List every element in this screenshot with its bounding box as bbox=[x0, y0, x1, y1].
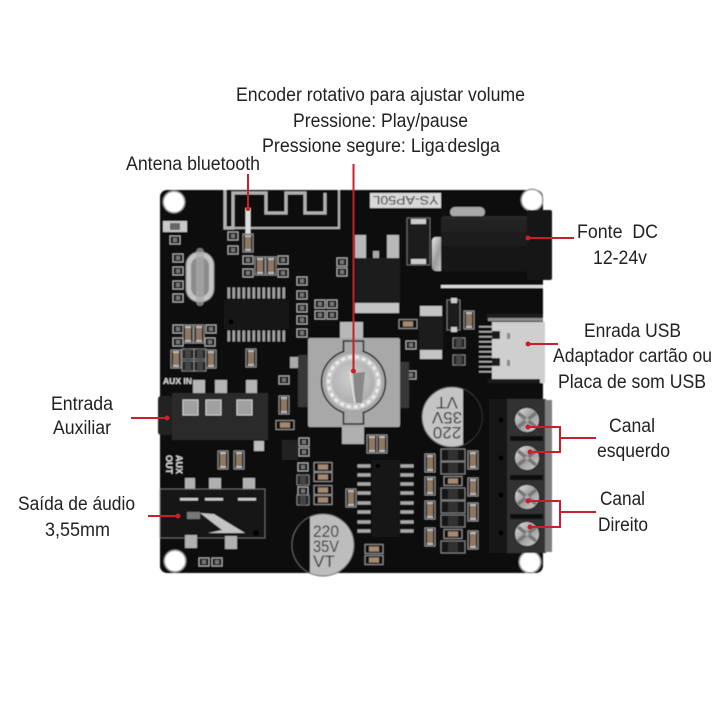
label: left channel: esquerdo bbox=[597, 441, 670, 462]
label: audio output bbox=[18, 494, 135, 541]
label: auxiliary input bbox=[51, 394, 113, 439]
connector: AUX input jack: AUX IN bbox=[163, 377, 192, 386]
label: audio output: Saída de áudio bbox=[18, 494, 135, 515]
heading: encoder callout bbox=[236, 85, 525, 157]
bluetooth antenna trace bbox=[225, 190, 339, 236]
rotary encoder bbox=[298, 322, 409, 444]
label: right channel bbox=[598, 489, 648, 536]
label: bluetooth antenna: Antena bluetooth bbox=[126, 154, 260, 175]
label: right channel: Canal bbox=[600, 489, 645, 510]
label: USB input: Enrada USB bbox=[584, 321, 681, 342]
capacitor: lower left 220 35V bbox=[292, 514, 354, 576]
label: audio output: 3,55mm bbox=[45, 520, 110, 541]
capacitor: lower left 220 35V: 35V bbox=[313, 537, 340, 556]
panel: circuit board bbox=[158, 188, 552, 576]
capacitor: upper right 220 35V: 220 bbox=[433, 423, 461, 442]
heading: encoder callout: Pressione segure: Liga bbox=[262, 136, 456, 157]
connector: AUX output jack bbox=[160, 455, 265, 566]
label: auxiliary input: Auxiliar bbox=[53, 418, 112, 439]
board label: YS-AP50L bbox=[372, 193, 438, 207]
voltage regulator bbox=[355, 235, 400, 313]
connector: DC power jack bbox=[432, 207, 552, 288]
connector: USB-C port bbox=[479, 314, 545, 383]
small components: upper left bbox=[163, 221, 347, 371]
label: USB input: Placa de som USB bbox=[558, 372, 706, 393]
heading: encoder callout: - bbox=[445, 137, 447, 147]
capacitor: upper right 220 35V: 35V bbox=[431, 408, 462, 427]
crystal oscillator bbox=[186, 248, 214, 306]
arrows: red pointer lines bbox=[131, 164, 596, 530]
capacitor: upper right 220 35V bbox=[422, 387, 482, 447]
chip: audio controller bbox=[224, 288, 289, 342]
label: left channel: Canal bbox=[609, 416, 655, 437]
capacitor: lower left 220 35V: 220 bbox=[313, 522, 339, 541]
capacitor: lower left 220 35V: VT bbox=[313, 552, 335, 571]
heading: encoder callout: Pressione: Play/pause bbox=[293, 111, 468, 132]
label: DC power: Fonte DC bbox=[577, 222, 658, 243]
label: USB input bbox=[553, 321, 712, 393]
diodes and small parts near power input bbox=[399, 218, 474, 379]
heading: encoder callout: Encoder rotativo para ajustar volume bbox=[236, 85, 525, 106]
label: DC power bbox=[577, 222, 658, 269]
label: auxiliary input: Entrada bbox=[51, 394, 113, 415]
small components: center bbox=[218, 376, 387, 564]
label: DC power: 12-24v bbox=[593, 248, 647, 269]
connector: AUX output jack: AUX bbox=[174, 455, 184, 474]
capacitor: upper right 220 35V: VT bbox=[436, 393, 458, 412]
small components: lower right bbox=[425, 449, 478, 553]
chip: amplifier bbox=[358, 460, 414, 537]
label: left channel bbox=[597, 416, 670, 462]
heading: encoder callout: deslga bbox=[447, 136, 500, 157]
icon: mounting holes bbox=[162, 188, 544, 574]
connector: AUX output jack: OUT bbox=[164, 455, 174, 474]
label: right channel: Direito bbox=[598, 515, 648, 536]
connector: screw terminal block bbox=[489, 399, 552, 553]
connector: AUX input jack bbox=[158, 377, 268, 451]
